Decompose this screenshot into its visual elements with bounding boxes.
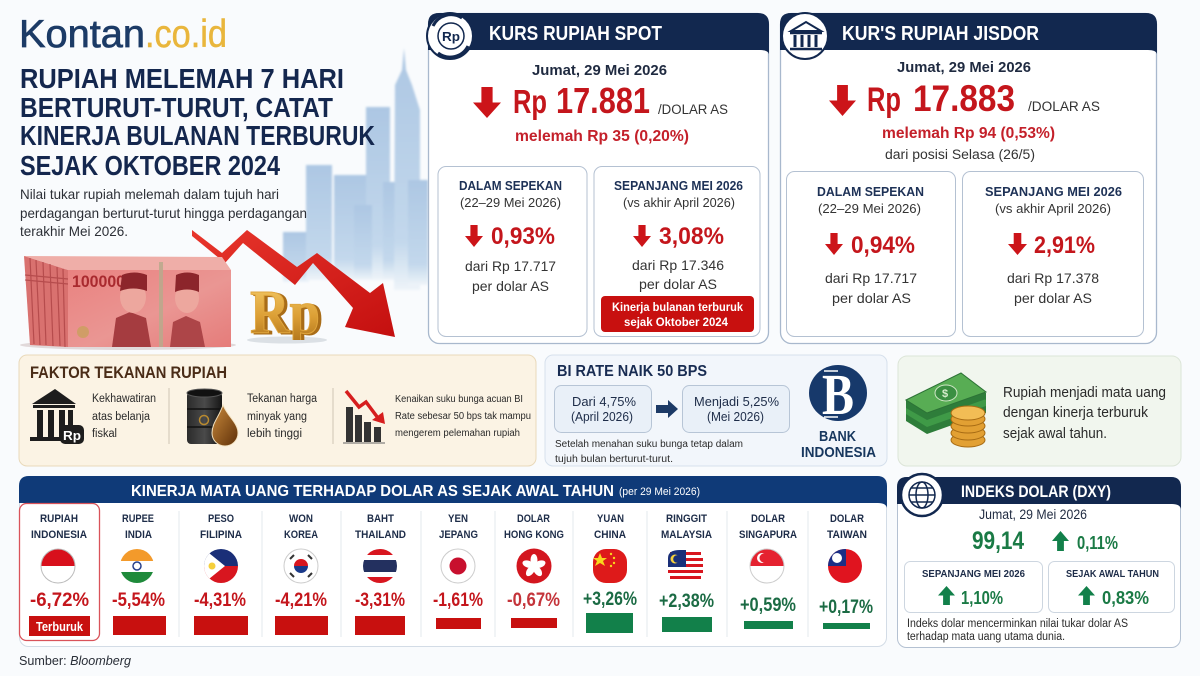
card: weekly: 0,94% [851,232,915,259]
card: monthly: 3,08% [659,223,724,250]
box: new rate: (Mei 2026) [707,410,764,424]
title: SEJAK OKTOBER 2024 [20,150,280,181]
illustration: gold Rp: Rp [250,279,320,347]
column: dolar singapura [739,513,797,629]
text: oil prices: Tekanan harga [247,393,318,405]
intro text [20,186,307,239]
jisdor rate: 17.883 [913,78,1015,119]
logo: Bank Indonesia: BANK [819,428,856,445]
column: dolar taiwan: DOLAR [830,513,864,525]
box: new rate: Menjadi 5,25% [694,394,779,409]
box: previous rate: Dari 4,75% [572,394,636,409]
card: weekly: DALAM SEPEKAN [459,179,562,193]
intro text: perdagangan berturut-turut hingga perdagangan [20,205,307,221]
panel header [19,476,887,508]
card: weekly [786,172,956,336]
note: Setelah menahan suku bunga tetap dalam [555,439,743,450]
panel: bi rate [545,355,887,466]
daily change: 0,11% [1077,532,1118,553]
text: fiscal worry: Kekhawatiran [92,393,156,405]
column: yen jepang: JEPANG [439,529,478,541]
illustration: stack of 100000 rupiah notes: 100000 [72,272,125,291]
note: terhadap mata uang utama dunia. [907,631,1065,643]
column: yen jepang: YEN [448,513,468,525]
column: dolar taiwan [819,513,873,629]
heading: KINERJA MATA UANG TERHADAP DOLAR AS SEJAK AWAL TAHUN [131,483,614,500]
spot rate: 17.881 [556,80,650,121]
icon: bank building [782,13,828,59]
jisdor rate: Rp [867,81,901,119]
panel: kurs rupiah spot [427,13,769,344]
note: tujuh bulan berturut-turut. [555,454,673,465]
panel: kurs rupiah jisdor [780,13,1157,344]
title [20,63,375,181]
column: ringgit malaysia: RINGGIT [666,513,707,525]
column: dolar hong kong: HONG KONG [504,529,564,541]
card: year to date [1048,562,1174,612]
card: monthly: (vs akhir April 2026) [623,196,735,210]
column: baht thailand: -3,31% [355,590,405,611]
column: rupiah indonesia: Terburuk [36,620,83,634]
logo: Kontan.co.id: Kontan [19,13,145,56]
column: peso filipina [194,513,248,635]
spot rate: Rp [513,83,547,120]
icon: bank with Rp: Rp [63,428,81,443]
column: dolar singapura: +0,59% [740,595,796,616]
icon: down arrow [829,85,856,116]
text: BI rate hike: Kenaikan suku bunga acuan BI [395,394,523,405]
panel: dollar index [897,474,1181,648]
date: Jumat, 29 Mei 2026 [897,60,1031,76]
logo: Bank Indonesia [801,362,876,461]
heading: KUR'S RUPIAH JISDOR [842,23,1039,45]
column: baht thailand [355,513,406,635]
text: BI rate hike [395,394,531,439]
text: dengan kinerja terburuk [1003,405,1149,421]
column: peso filipina: PESO [208,513,234,525]
arrow [656,400,678,418]
heading: KURS RUPIAH SPOT [489,23,662,45]
column: rupiah indonesia: RUPIAH [40,513,78,525]
portrait right [170,272,205,347]
portrait left [112,272,151,347]
heading: BI RATE NAIK 50 BPS [557,363,707,380]
card: weekly: DALAM SEPEKAN [817,185,924,199]
card: weekly: (22–29 Mei 2026) [460,196,561,210]
icon: falling bars [343,391,385,443]
card: weekly: 0,93% [491,223,555,250]
text [1003,385,1166,442]
card: monthly: per dolar AS [639,276,717,292]
comparison note: dari posisi Selasa (26/5) [885,147,1035,162]
column: yuan china: +3,26% [583,589,637,610]
text: fiscal worry: fiskal [92,428,117,440]
text: sejak awal tahun. [1003,426,1107,442]
column: yuan china: YUAN [597,513,624,525]
column: rupiah indonesia [20,504,100,640]
jisdor rate [867,78,1015,119]
title: RUPIAH MELEMAH 7 HARI [20,63,344,94]
text: Rupiah menjadi mata uang [1003,385,1166,401]
note [555,439,743,465]
panel: rupiah worst year to date [898,356,1181,466]
panel header [780,13,1157,54]
column: rupee india: RUPEE [122,513,154,525]
date: Jumat, 29 Mei 2026 [532,63,667,79]
card: month [904,562,1042,612]
card: monthly [594,166,760,336]
column: won korea [275,513,328,635]
card: year to date: 0,83% [1102,588,1149,608]
box: previous rate: (April 2026) [571,410,633,424]
column: dolar singapura: DOLAR [751,513,785,525]
text: BI rate hike: mengerem pelemahan rupiah [395,428,520,439]
card: weekly: dari Rp 17.717 [465,258,556,274]
panel: currency performance [19,476,887,646]
column: won korea: -4,21% [275,590,327,611]
logo: Kontan.co.id: .co.id [145,13,227,56]
source note: Sumber: Bloomberg [19,654,131,668]
column: dolar taiwan: TAIWAN [827,529,867,541]
city skyline illustration [283,48,428,290]
card: monthly: dari Rp 17.346 [632,257,724,273]
column: peso filipina: -4,31% [194,590,246,611]
logo: Bank Indonesia: INDONESIA [801,444,876,461]
icon: banknotes and coins: $ [942,388,948,400]
illustration: falling red arrow [192,230,395,337]
column: dolar taiwan: +0,17% [819,597,873,618]
icon: rupiah exchange [427,13,473,59]
column: yuan china [583,513,637,633]
title: KINERJA BULANAN TERBURUK [20,120,375,151]
column: yen jepang [433,513,483,629]
logo: Kontan.co.id [19,13,227,56]
card: monthly: dari Rp 17.378 [1007,270,1099,286]
column: ringgit malaysia [659,513,714,632]
card: weekly: dari Rp 17.717 [825,270,917,286]
box: previous rate [554,386,652,432]
icon: bank with Rp [30,389,84,444]
column: won korea: KOREA [284,529,318,541]
card: monthly: SEPANJANG MEI 2026 [614,179,743,193]
text: BI rate hike: Rate sebesar 50 bps tak mampu [395,411,531,422]
logo: Bank Indonesia: B [822,362,854,427]
card: month: SEPANJANG MEI 2026 [922,568,1025,580]
callout: worst month [601,296,754,332]
heading: (per 29 Mei 2026) [619,486,700,498]
illustration: gold Rp: Rp [253,280,323,348]
column: dolar hong kong: -0,67% [507,590,560,611]
column: baht thailand: THAILAND [355,529,406,541]
text: fiscal worry [92,393,156,440]
icon: rupiah exchange: Rp [442,29,460,44]
card: monthly: 2,91% [1034,232,1095,259]
card: monthly [962,172,1144,336]
callout: worst month: Kinerja bulanan terburuk [612,300,743,314]
card: weekly: per dolar AS [472,278,549,294]
index value: 99,14 [972,527,1024,555]
box: new rate [682,386,790,432]
column: yuan china: CHINA [594,529,626,541]
note [907,618,1128,643]
icon: oil barrel and drop [187,389,238,446]
column: won korea: WON [289,513,313,525]
panel header [428,13,769,54]
card: month: 1,10% [961,588,1003,608]
column: baht thailand: BAHT [367,513,394,525]
card: weekly: (22–29 Mei 2026) [818,202,921,216]
illustration: stack of 100000 rupiah notes [20,256,236,350]
heading: FAKTOR TEKANAN RUPIAH [30,364,227,382]
column: peso filipina: FILIPINA [200,529,242,541]
column: dolar singapura: SINGAPURA [739,529,797,541]
column: ringgit malaysia: +2,38% [659,591,714,612]
heading: INDEKS DOLAR (DXY) [961,482,1111,501]
card: year to date: SEJAK AWAL TAHUN [1066,568,1159,580]
unit: /DOLAR AS [1028,99,1100,114]
card: weekly [438,166,587,336]
text: fiscal worry: atas belanja [92,411,151,423]
card: monthly: SEPANJANG MEI 2026 [985,185,1122,199]
callout: worst month: sejak Oktober 2024 [624,315,728,329]
daily change: melemah Rp 35 (0,20%) [515,128,689,145]
note: Indeks dolar mencerminkan nilai tukar dolar AS [907,618,1128,630]
title: BERTURUT-TURUT, CATAT [20,92,333,123]
panel: faktor tekanan rupiah [19,355,536,466]
card: monthly: (vs akhir April 2026) [995,202,1111,216]
card: weekly: per dolar AS [832,290,911,306]
column: rupee india: -5,54% [112,590,165,611]
column: rupiah indonesia: INDONESIA [31,529,87,541]
column: yen jepang: -1,61% [433,590,483,611]
intro text: terakhir Mei 2026. [20,223,128,239]
text: oil prices: minyak yang [247,411,307,423]
column: dolar hong kong [504,513,564,628]
panel header [897,477,1181,509]
column: rupee india [112,513,166,635]
icon: down arrow [473,87,501,118]
text: oil prices: lebih tinggi [247,428,302,440]
date: Jumat, 29 Mei 2026 [979,507,1087,522]
icon: up arrow [1052,531,1069,551]
column: ringgit malaysia: MALAYSIA [661,529,712,541]
column: rupiah indonesia: -6,72% [30,590,89,611]
daily change: melemah Rp 94 (0,53%) [882,125,1055,142]
column: rupee india: INDIA [125,529,152,541]
icon: banknotes and coins [906,373,986,447]
unit: /DOLAR AS [658,102,728,117]
column: dolar hong kong: DOLAR [517,513,550,525]
intro text: Nilai tukar rupiah melemah dalam tujuh hari [20,186,279,202]
spot rate [513,80,650,121]
icon: globe [901,474,943,516]
card: monthly: per dolar AS [1014,290,1092,306]
text: oil prices [247,393,318,440]
